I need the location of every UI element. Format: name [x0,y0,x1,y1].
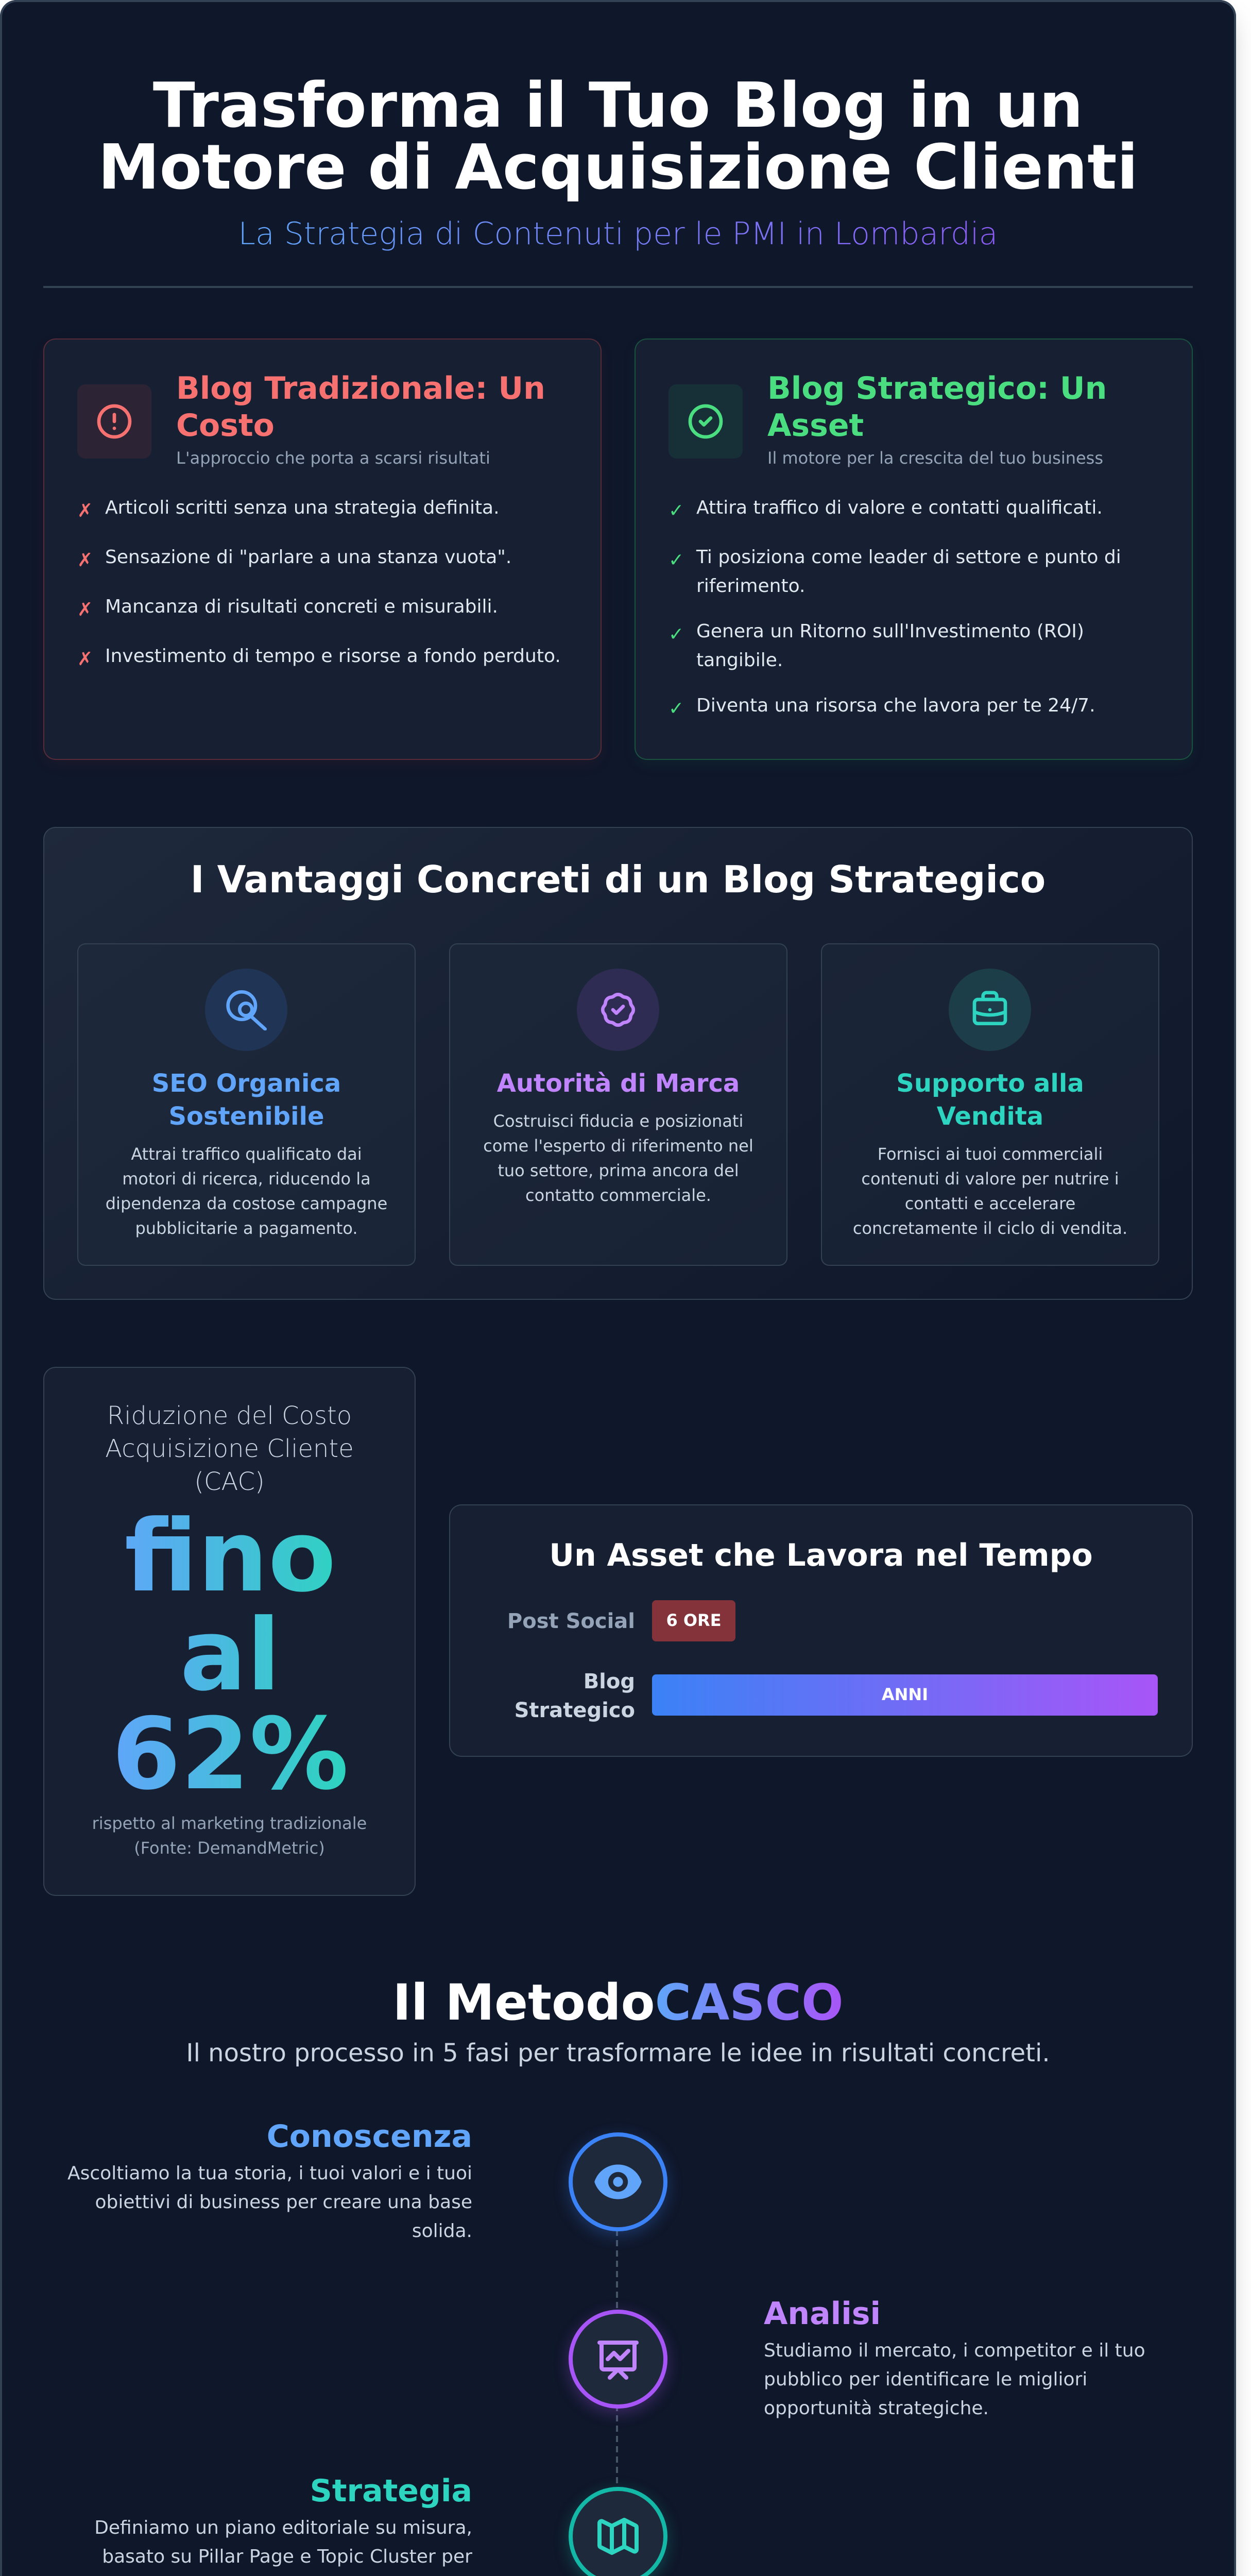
bar: post social [652,1600,735,1641]
panel: blog tradizionale [43,338,602,760]
title: Motore di Acquisizione Clienti [98,132,1138,204]
heading: Asset [767,408,864,444]
list: problemi: ✗ [77,500,93,521]
step 3: strategia [94,2473,472,2576]
step text [94,2517,472,2576]
list: problemi: Investimento di tempo e risorse a fondo perduto. [105,646,561,667]
list: benefici [669,497,1121,719]
card title: Supporto alla [896,1069,1084,1098]
card text: come l'esperto di riferimento nel [483,1136,753,1156]
method heading: Il MetodoCASCO [392,1974,844,2031]
step text [67,2163,472,2242]
card text: Attrai traffico qualificato dai [131,1144,362,1164]
card title: Vendita [937,1102,1043,1131]
stat label [105,1401,354,1496]
card text [106,1144,387,1238]
list: problemi: Mancanza di risultati concreti e misurabili. [105,596,498,617]
heading: Blog Strategico: Un [767,370,1107,406]
step title: Strategia [310,2473,472,2509]
icon: search [205,969,287,1051]
card text: dipendenza da costose campagne [106,1194,387,1213]
stat label: Acquisizione Cliente [105,1434,354,1463]
icon: eye [569,2132,667,2231]
card text: Fornisci ai tuoi commerciali [878,1144,1103,1164]
card text [483,1111,753,1205]
step title: Conoscenza [267,2119,472,2155]
list: benefici: riferimento. [696,575,805,597]
list: benefici: Diventa una risorsa che lavora per te 24/7. [696,695,1095,716]
list: problemi: Sensazione di "parlare a una stanza vuota". [105,547,511,568]
panel: vantaggi [43,827,1193,1300]
card text: contatto commerciale. [525,1185,711,1205]
title [98,70,1138,204]
method subtitle: Il nostro processo in 5 fasi per trasformare le idee in risultati concreti. [186,2039,1050,2067]
card text: Costruisci fiducia e posizionati [493,1111,743,1131]
panel: asset nel tempo [449,1504,1193,1757]
step text: Ascoltiamo la tua storia, i tuoi valori e i tuoi [67,2163,472,2184]
step text: pubblico per identificare le migliori [764,2369,1087,2390]
bar: post social: 6 ORE [666,1611,722,1630]
card text: motori di ricerca, riducendo la [122,1169,371,1189]
icon: presentation chart [569,2310,667,2409]
card text [853,1144,1127,1238]
icon: alert [77,384,151,459]
panel: riduzione CAC [43,1367,416,1896]
label: blog strategico: Blog [584,1670,635,1693]
stat note [92,1814,367,1858]
list: problemi: ✗ [77,649,93,670]
card: SEO [77,943,416,1266]
stat label: Riduzione del Costo [107,1401,352,1430]
panel: blog strategico [635,338,1193,760]
icon: check [669,384,743,459]
label: blog strategico [515,1670,635,1722]
step text: basato su Pillar Page e Topic Cluster per [102,2546,472,2567]
list: benefici: Ti posiziona come leader di settore e punto di [696,547,1121,568]
card title [152,1069,341,1131]
card title: Sostenibile [168,1102,324,1131]
card text: tuo settore, prima ancora del [498,1161,739,1180]
bar: blog strategico [652,1674,1158,1716]
list: problemi: ✗ [77,599,93,620]
card title [896,1069,1084,1131]
card: vendita [821,943,1159,1266]
card title: Autorità di Marca [497,1069,740,1098]
step text: solida. [412,2221,472,2242]
big number: 62% [112,1697,349,1812]
subtitle: La Strategia di Contenuti per le PMI in Lombardia [238,216,998,252]
stat note: (Fonte: DemandMetric) [134,1838,325,1858]
card: autorità [449,943,787,1266]
step text: opportunità strategiche. [764,2398,989,2419]
subheading: Il motore per la crescita del tuo business [767,448,1103,468]
list: benefici: Attira traffico di valore e contatti qualificati. [696,497,1103,518]
subheading: L'approccio che porta a scarsi risultati [176,448,490,468]
big number [112,1507,349,1804]
list: benefici: tangibile. [696,650,783,671]
list: benefici: Genera un Ritorno sull'Investimento (ROI) [696,621,1084,642]
card text: pubblicitarie a pagamento. [135,1218,358,1238]
big number: fino [125,1499,336,1614]
list: benefici: ✓ [669,500,684,521]
big number: al [180,1598,281,1713]
icon: map [569,2487,667,2576]
card text: contatti e accelerare [905,1194,1075,1213]
step text: obiettivi di business per creare una base [95,2192,472,2213]
step 1: conoscenza [67,2119,472,2242]
card text: contenuti di valore per nutrire i [861,1169,1119,1189]
heading: Blog Tradizionale: Un [176,370,545,406]
list: problemi: Articoli scritti senza una strategia definita. [105,497,500,518]
card title: SEO Organica [152,1069,341,1098]
heading: Costo [176,408,275,444]
step text: Studiamo il mercato, i competitor e il tuo [764,2340,1145,2361]
heading [767,370,1107,444]
card text: concretamente il ciclo di vendita. [853,1218,1127,1238]
title: Trasforma il Tuo Blog in un [153,70,1083,142]
icon: badge [577,969,659,1051]
list: benefici: ✓ [669,698,684,719]
heading: I Vantaggi Concreti di un Blog Strategico [191,858,1046,901]
heading [176,370,545,444]
heading: Un Asset che Lavora nel Tempo [549,1537,1093,1573]
bar: blog strategico: ANNI [882,1685,928,1704]
step 2: analisi [764,2296,1145,2419]
step title: Analisi [764,2296,881,2332]
list: benefici: ✓ [669,624,684,645]
label: blog strategico: Strategico [515,1699,635,1722]
step text [764,2340,1145,2419]
icon: briefcase [949,969,1031,1051]
step text: Definiamo un piano editoriale su misura, [94,2517,472,2538]
list: benefici: ✓ [669,550,684,571]
stat label: (CAC) [194,1467,265,1496]
list: problemi [77,497,561,670]
label: post social: Post Social [507,1609,635,1633]
stat note: rispetto al marketing tradizionale [92,1814,367,1833]
list: problemi: ✗ [77,550,93,571]
